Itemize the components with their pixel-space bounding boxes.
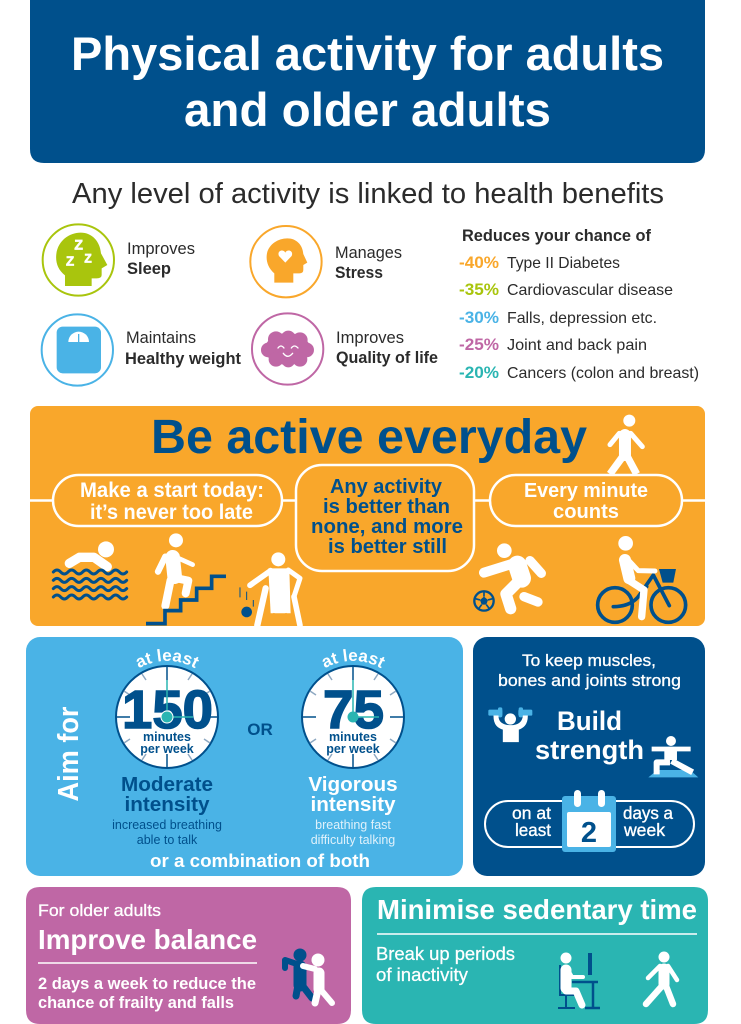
icon: footballer	[474, 543, 541, 611]
pill: every minute counts	[490, 475, 682, 526]
label: or: OR	[247, 720, 273, 739]
clock: 75 minutes: at least	[322, 649, 385, 668]
text: sleep	[127, 240, 195, 278]
panel: risk reductions: Reduces your chance of	[462, 227, 652, 245]
pill: every minute counts: counts	[553, 501, 619, 523]
text: weight: Maintains	[126, 329, 196, 347]
icon: person climbing stairs	[146, 533, 226, 624]
panel: improve balance	[26, 887, 351, 1024]
text: moderate intensity: Moderate	[121, 773, 213, 796]
text: moderate intensity: intensity	[124, 793, 210, 816]
text: moderate intensity: able to talk	[137, 833, 198, 847]
heading: Build	[557, 706, 622, 736]
icon: sleep head: Z	[84, 251, 92, 265]
icon: sleep head: Z	[66, 254, 74, 269]
icon: stress head	[250, 226, 322, 297]
panel: benefits	[42, 224, 438, 386]
text: sleep: Sleep	[127, 260, 171, 278]
panel: risk reductions: Joint and back pain	[507, 337, 647, 354]
text: weight: Healthy weight	[125, 350, 242, 368]
icon: swimmer	[53, 541, 127, 599]
label: aim for: Aim for	[53, 706, 85, 802]
icon: smiling cloud	[252, 313, 323, 385]
callout: any activity: is better still	[328, 535, 447, 558]
callout: any activity	[296, 465, 474, 571]
panel: risk reductions	[459, 227, 699, 382]
title	[71, 27, 664, 136]
text: vigorous intensity: intensity	[310, 793, 396, 816]
icon: sleep head: Z	[74, 236, 83, 252]
text: balance detail: 2 days a week to reduce the	[38, 975, 256, 993]
text: combination: or a combination of both	[150, 850, 370, 871]
text: weight	[125, 329, 242, 368]
text: vigorous intensity: breathing fast	[315, 818, 391, 832]
pill: 2 days a week: week	[623, 820, 665, 840]
pill: every minute counts: Every minute	[524, 480, 648, 502]
icon: calendar: 2	[581, 817, 597, 849]
pill: make a start: Make a start today:	[80, 479, 264, 502]
clock: 150 minutes: per week	[140, 742, 194, 756]
text: intro: bones and joints strong	[498, 672, 681, 690]
pill: 2 days a week: days a	[623, 803, 673, 823]
panel: minimise sedentary time	[362, 887, 708, 1024]
subtitle: Any level of activity is linked to health benefits	[72, 178, 664, 210]
panel: risk reductions: Cancers (colon and breast)	[507, 365, 699, 382]
callout: any activity: Any activity	[330, 475, 443, 498]
heading: Improve balance	[38, 924, 257, 955]
icon: walking person	[610, 415, 642, 474]
clock: 150 minutes	[115, 649, 219, 769]
panel: be active everyday	[30, 406, 705, 626]
text: intro	[498, 652, 681, 690]
panel: risk reductions: Cardiovascular disease	[507, 282, 673, 299]
text: stress	[335, 244, 402, 282]
icon: sleep head	[43, 224, 114, 296]
heading: Minimise sedentary time	[377, 894, 697, 925]
callout: any activity: none, and more	[311, 515, 463, 538]
text: stress: Stress	[335, 264, 383, 282]
text: quality of life: Quality of life	[336, 349, 438, 367]
clock: 150 minutes: 150	[122, 680, 213, 740]
panel: risk reductions: -20%	[459, 363, 499, 382]
panel: risk reductions: Falls, depression etc.	[507, 310, 657, 327]
panel: risk reductions: Type II Diabetes	[507, 255, 620, 272]
text: vigorous intensity	[308, 773, 398, 847]
text: stress: Manages	[335, 244, 402, 262]
heading	[535, 706, 644, 765]
icon: person with walker	[240, 552, 300, 625]
clock: 75 minutes	[301, 649, 405, 769]
text: for older adults: For older adults	[38, 902, 161, 920]
panel: risk reductions: -40%	[459, 253, 499, 272]
clock: 75 minutes: minutes	[329, 730, 377, 744]
clock: 150 minutes: minutes	[143, 730, 191, 744]
panel: risk reductions: -35%	[459, 280, 499, 299]
text: break up: Break up periods	[376, 944, 515, 964]
text: moderate intensity	[112, 773, 222, 847]
panel: build strength	[473, 637, 705, 876]
clock: 75 minutes: 75	[323, 680, 384, 740]
title: and older adults	[184, 83, 551, 136]
icon: calendar	[562, 790, 616, 852]
text: balance detail: chance of frailty and falls	[38, 994, 234, 1012]
icon: two people balancing	[285, 948, 332, 1003]
heading: Be active everyday	[151, 410, 587, 464]
icon: cyclist	[598, 536, 686, 622]
text: vigorous intensity: difficulty talking	[311, 833, 395, 847]
heading: strength	[535, 735, 644, 765]
panel: risk reductions: -30%	[459, 308, 499, 327]
icon: scale	[42, 314, 113, 386]
text: break up: of inactivity	[376, 965, 468, 985]
pill: 2 days a week: least	[515, 820, 551, 840]
icon: person at desk	[558, 952, 600, 1008]
icon: walking person	[646, 952, 677, 1004]
panel: title	[30, 0, 705, 163]
text: break up	[376, 944, 515, 985]
text: sleep: Improves	[127, 240, 195, 258]
pill: make a start	[53, 475, 282, 526]
callout: any activity: is better than	[323, 495, 450, 518]
title: Physical activity for adults	[71, 27, 664, 80]
clock: 150 minutes: at least	[136, 649, 199, 668]
icon: weightlifter	[488, 707, 532, 742]
text: vigorous intensity: Vigorous	[308, 773, 398, 796]
clock: 75 minutes: per week	[326, 742, 380, 756]
icon: yoga lunge	[648, 736, 698, 777]
text: moderate intensity: increased breathing	[112, 818, 222, 832]
text: quality of life	[336, 329, 438, 367]
panel: aim for	[26, 637, 463, 876]
pill: make a start: it’s never too late	[90, 501, 253, 524]
pill: 2 days a week	[485, 790, 694, 852]
pill: 2 days a week: on at	[512, 803, 551, 823]
text: quality of life: Improves	[336, 329, 404, 347]
panel: risk reductions: -25%	[459, 335, 499, 354]
text: intro: To keep muscles,	[522, 652, 656, 670]
text: balance detail	[38, 975, 256, 1012]
